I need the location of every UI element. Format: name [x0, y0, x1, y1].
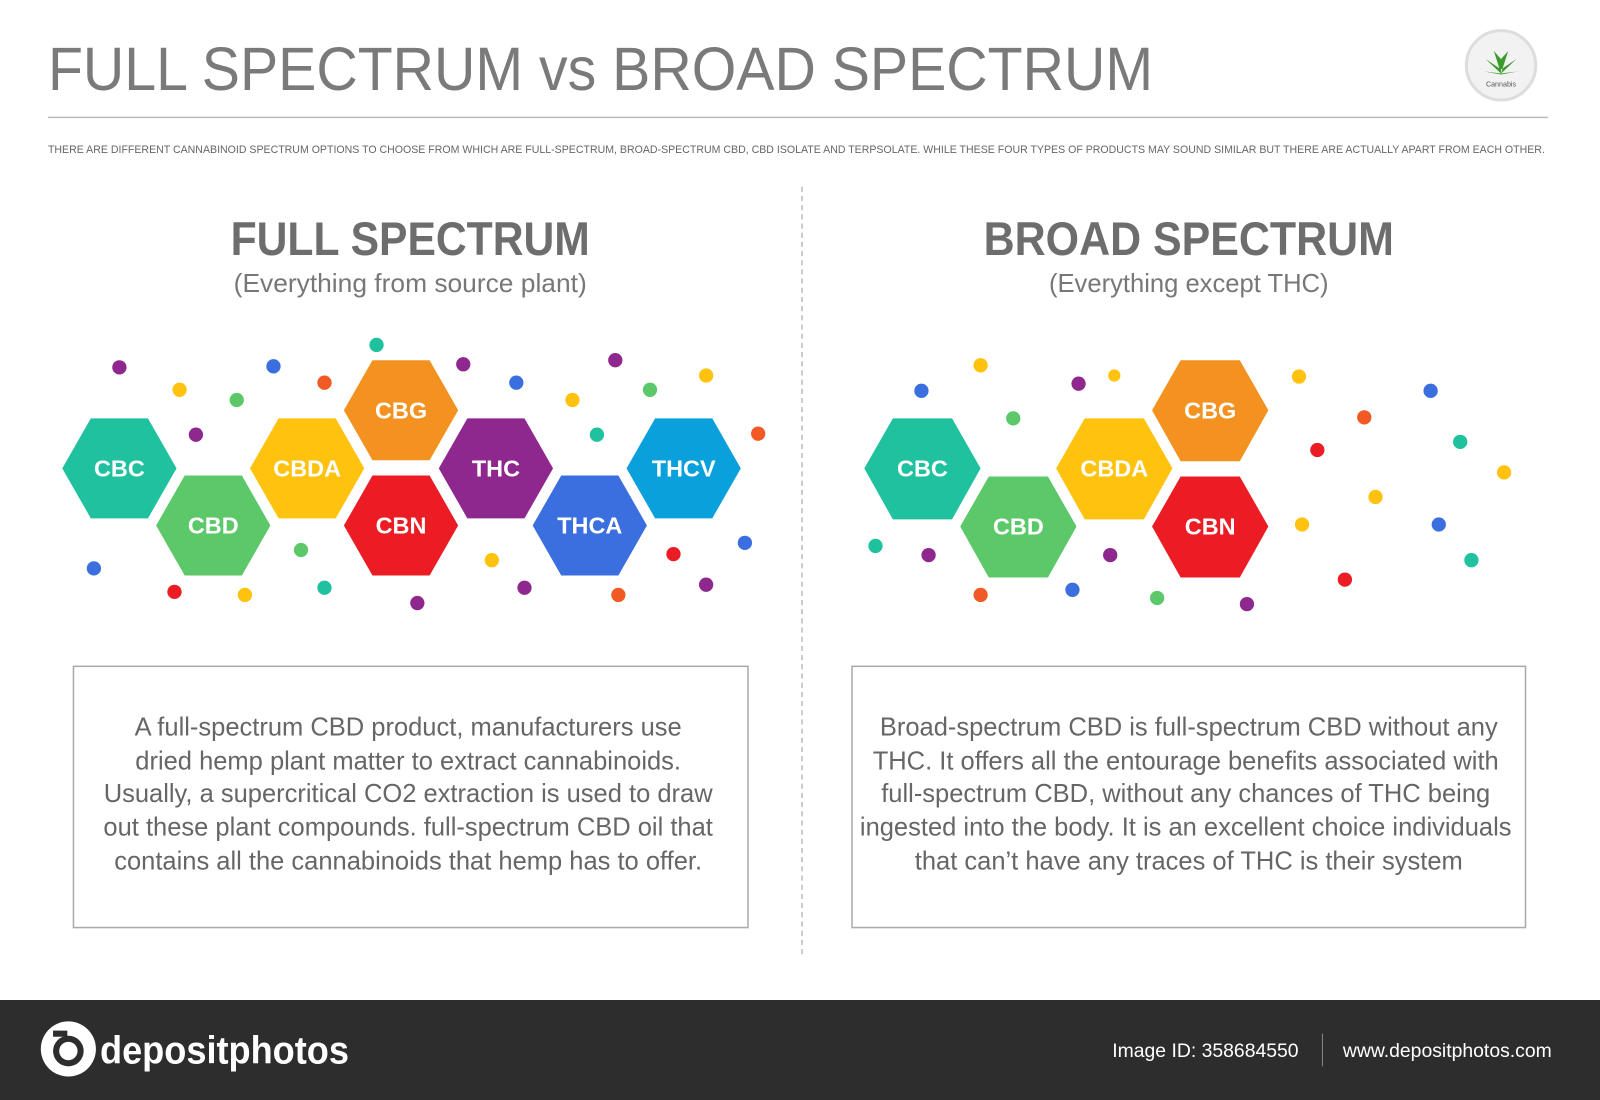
text box: broad spectrum description: that can’t have any traces of THC is their system [915, 847, 1463, 875]
hexagons right: CBDA [1080, 456, 1148, 482]
title: FULL SPECTRUM vs BROAD SPECTRUM [48, 35, 1153, 103]
footer bar [0, 1000, 1600, 1100]
intro text: THERE ARE DIFFERENT CANNABINOID SPECTRUM OPTIONS TO CHOOSE FROM WHICH ARE FULL-SPECTRUM, BROAD-SPECTRUM CBD, CBD ISOLATE AND TERPSOLATE. WHILE THESE FOUR TYPES OF PRODUCTS MAY SOUND SIMILAR BUT THERE ARE ACTUALLY APART FROM EACH OTHER. [48, 144, 1545, 156]
text box: full spectrum description: dried hemp plant matter to extract cannabinoids. [135, 747, 681, 775]
hexagons left: CBC [94, 456, 145, 482]
hexagons left: CBN [376, 513, 426, 539]
hexagons right: CBD [993, 514, 1044, 540]
text box: broad spectrum description: ingested into the body. It is an excellent choice individuals [860, 814, 1512, 842]
subheading: (Everything from source plant) [234, 270, 587, 298]
subheading: (Everything except THC) [1049, 270, 1329, 298]
heading: broad spectrum: BROAD SPECTRUM [984, 213, 1394, 265]
text box: broad spectrum description: full-spectrum CBD, without any chances of THC being [881, 780, 1490, 808]
logo: cannabis badge [1466, 31, 1536, 100]
panel: broad spectrum [852, 213, 1526, 928]
hexagons right: CBG [1184, 397, 1236, 423]
hexagons left: THCV [652, 456, 716, 482]
hexagons left: THCA [557, 513, 622, 539]
footer url: www.depositphotos.com [1342, 1040, 1552, 1062]
heading: full spectrum: FULL SPECTRUM [231, 213, 590, 265]
footer brand: depositphotos [100, 1029, 349, 1072]
hexagons left: CBDA [273, 456, 341, 482]
panel: full spectrum [62, 213, 765, 928]
text box: broad spectrum description: THC. It offers all the entourage benefits associated with [873, 747, 1499, 775]
hexagons right: CBC [897, 456, 948, 482]
text box: full spectrum description [73, 666, 748, 928]
hexagons left: CBD [188, 513, 239, 539]
hexagons right [864, 360, 1268, 578]
text box: broad spectrum description [852, 666, 1526, 928]
text box: full spectrum description: out these plant compounds. full-spectrum CBD oil that [103, 814, 713, 842]
footer image id: Image ID: 358684550 [1112, 1040, 1299, 1062]
icon: camera logo [41, 1021, 96, 1077]
hexagons right: CBN [1185, 514, 1236, 540]
text box: full spectrum description: Usually, a supercritical CO2 extraction is used to draw [104, 780, 713, 808]
hexagons left [62, 360, 741, 576]
text box: broad spectrum description: Broad-spectrum CBD is full-spectrum CBD without any [880, 714, 1498, 742]
dots left [87, 338, 765, 610]
logo: cannabis badge: Cannabis [1486, 81, 1517, 89]
text box: full spectrum description: A full-spectrum CBD product, manufacturers use [135, 714, 682, 742]
dots right [868, 358, 1511, 611]
hexagons left: THC [472, 456, 520, 482]
hexagons left: CBG [375, 397, 427, 423]
text box: full spectrum description: contains all the cannabinoids that hemp has to offer. [114, 847, 702, 875]
